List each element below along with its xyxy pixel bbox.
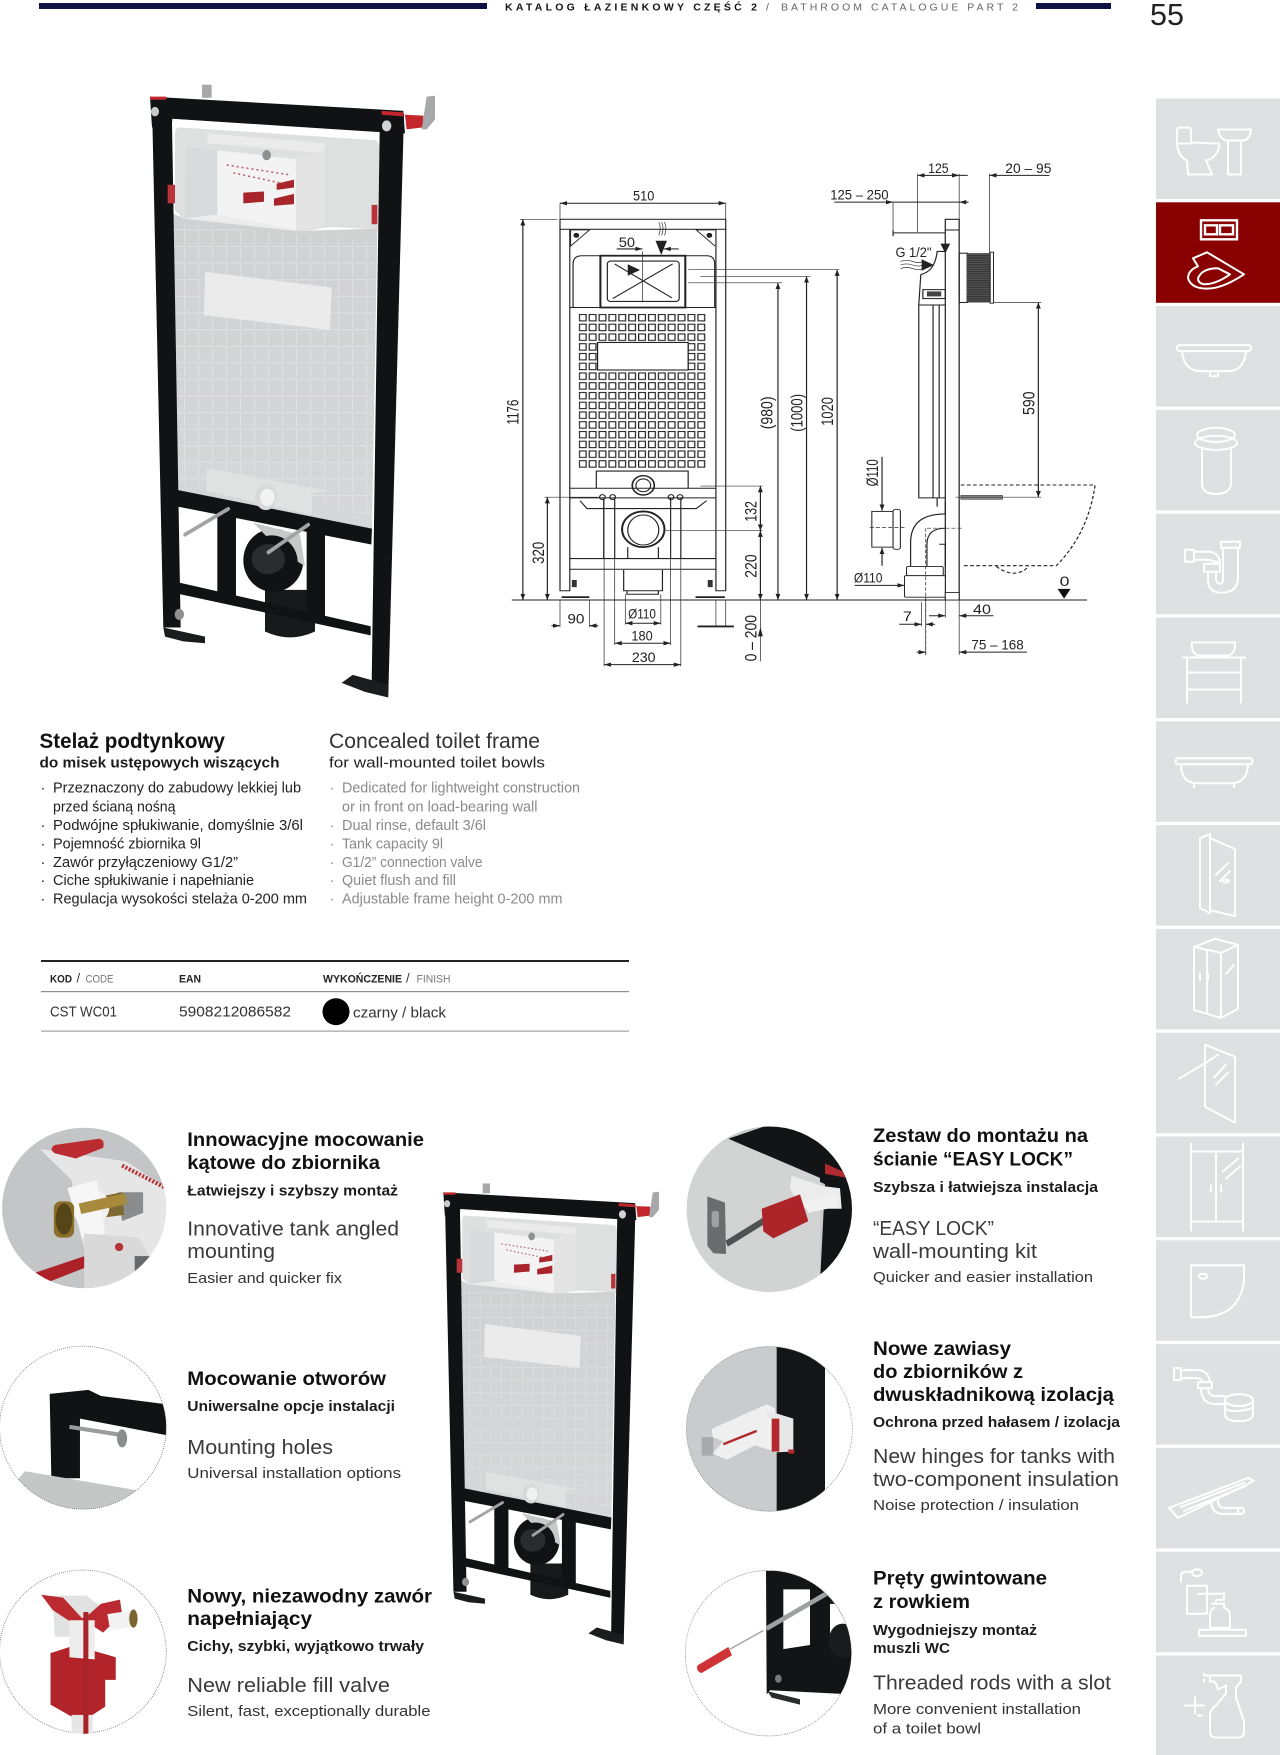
feature list English: ·	[330, 836, 334, 852]
tile: linear drain	[1156, 1448, 1280, 1548]
feature text: easy lock: ścianie “EASY LOCK”	[873, 1148, 1073, 1170]
feature text: mounting holes: Uniwersalne opcje instalacji	[187, 1399, 395, 1415]
dimension: 90	[551, 600, 598, 627]
dimension: 590	[956, 302, 1041, 497]
dimension: (1000): (1000)	[789, 394, 807, 432]
feature text: hinges	[873, 1338, 1121, 1514]
label: G 1/2 inlet: G 1/2"	[896, 245, 931, 261]
dimension: lower diameter 110: Ø110	[854, 570, 882, 586]
feature text: threaded rods: Threaded rods with a slot	[873, 1672, 1111, 1694]
feature text: fill valve: Cichy, szybki, wyjątkowo trwały	[187, 1639, 424, 1655]
feature text: fill valve: napełniający	[187, 1608, 312, 1630]
feature list Polish: Regulacja wysokości stelaża 0-200 mm	[53, 892, 307, 908]
feature text: threaded rods: Wygodniejszy montaż	[873, 1623, 1037, 1639]
feature list Polish: ·	[40, 855, 45, 871]
table value: finish: czarny / black	[353, 1005, 447, 1022]
finish swatch: black	[322, 998, 350, 1025]
tile: cleaning spray	[1156, 1656, 1280, 1755]
feature text: hinges: do zbiorników z	[873, 1361, 1023, 1383]
detail circle: easy lock	[686, 1126, 852, 1292]
feature list English: Quiet flush and fill	[342, 873, 456, 889]
second product photo: concealed frame	[443, 1183, 659, 1644]
dimensions: 40, 7, 75-168: 75 – 168	[971, 638, 1024, 653]
label: G 1/2 inlet	[896, 245, 934, 271]
dimension: 320	[530, 497, 598, 600]
catalogue running title: BATHROOM CATALOGUE PART 2	[781, 2, 1018, 14]
product photo: concealed frame	[150, 85, 435, 697]
feature list English: Adjustable frame height 0-200 mm	[342, 892, 562, 908]
table header: code: CODE	[86, 974, 114, 986]
dashed toilet bowl outline	[961, 485, 1095, 573]
feature text: mounting holes	[187, 1368, 401, 1482]
feature text: tank angled mounting: Innowacyjne mocowanie	[187, 1129, 424, 1151]
product title Polish: Stelaż podtynkowy	[40, 730, 225, 753]
tile: shower tray	[1156, 1240, 1280, 1341]
feature list Polish: ·	[40, 818, 45, 834]
table header: finish: /	[406, 971, 410, 986]
feature text: easy lock: Quicker and easier installation	[873, 1270, 1093, 1286]
feature list Polish: ·	[40, 836, 45, 852]
product title English	[329, 730, 545, 772]
catalogue running title	[505, 0, 1018, 14]
dimension: (980): (980)	[759, 396, 777, 429]
tile: shower door	[1156, 825, 1280, 926]
feature list Polish: Zawór przyłączeniowy G1/2”	[53, 855, 238, 871]
header bar right	[1036, 3, 1111, 9]
catalogue running title: KATALOG ŁAZIENKOWY CZĘŚĆ 2	[505, 0, 757, 14]
feature list Polish: ·	[40, 781, 45, 797]
feature list Polish: ·	[40, 873, 45, 889]
feature list English: Tank capacity 9l	[342, 836, 443, 852]
feature text: threaded rods: Pręty gwintowane	[873, 1568, 1047, 1590]
table header: finish: FINISH	[416, 974, 451, 986]
detail circle: threaded rods	[683, 1567, 857, 1740]
dimensions: 125, 20-95, 125-250: 125	[928, 161, 949, 177]
feature list Polish: Podwójne spłukiwanie, domyślnie 3/6l	[53, 818, 303, 834]
dimensions: 132, 220, 0-200	[666, 486, 763, 661]
dimensions: 125, 20-95, 125-250: 20 – 95	[1005, 161, 1051, 177]
technical drawing with dimensions	[505, 161, 1095, 666]
product title English: for wall-mounted toilet bowls	[329, 754, 545, 772]
dimensions: 132, 220, 0-200: 0 – 200	[742, 615, 761, 661]
feature text: threaded rods: of a toilet bowl	[873, 1722, 981, 1738]
tile: washbasin	[1156, 306, 1280, 407]
feature text: easy lock: Zestaw do montażu na	[873, 1125, 1088, 1147]
feature list English: ·	[330, 818, 334, 834]
side view of frame	[893, 219, 993, 655]
dimension: 510	[560, 189, 726, 219]
feature text: easy lock: Szybsza i łatwiejsza instalacja	[873, 1180, 1099, 1196]
dimension: 590: 590	[1020, 391, 1039, 415]
dimension: 50 with water inlet arrow	[617, 222, 679, 301]
feature text: threaded rods	[873, 1568, 1111, 1738]
feature text: threaded rods: z rowkiem	[873, 1591, 970, 1613]
dimension: diameter 110 front: Ø110	[628, 606, 656, 622]
dimension: 320: 320	[530, 542, 548, 564]
feature text: hinges: dwuskładnikową izolacją	[873, 1384, 1114, 1406]
feature text: tank angled mounting: mounting	[187, 1241, 275, 1263]
tile: flush plate and seat (active)	[1156, 202, 1280, 303]
feature list Polish: Przeznaczony do zabudowy lekkiej lub	[53, 781, 301, 797]
feature list English: ·	[330, 892, 334, 908]
feature text: easy lock	[872, 1125, 1099, 1286]
zero level marker: 0	[1060, 574, 1069, 590]
feature text: fill valve: New reliable fill valve	[187, 1675, 390, 1697]
feature text: tank angled mounting: kątowe do zbiornika	[187, 1152, 380, 1174]
feature list Polish	[40, 781, 307, 908]
feature text: tank angled mounting: Easier and quicker fix	[187, 1271, 343, 1287]
table header: code	[50, 971, 114, 986]
feature list English: or in front on load-bearing wall	[342, 800, 538, 816]
feature text: mounting holes: Mounting holes	[187, 1437, 333, 1459]
feature text: easy lock: wall-mounting kit	[872, 1241, 1037, 1263]
detail: outlet piece with diameter 110	[864, 457, 905, 566]
dimensions: 125, 20-95, 125-250	[830, 161, 1051, 253]
product title English: Concealed toilet frame	[329, 730, 540, 753]
product title Polish: do misek ustępowych wiszących	[40, 754, 280, 772]
dimension: 90: 90	[567, 611, 584, 627]
tile: double shower door	[1156, 1136, 1280, 1237]
catalogue running title: /	[766, 2, 769, 14]
feature list Polish: przed ścianą nośną	[53, 800, 176, 816]
feature text: mounting holes: Universal installation options	[187, 1466, 401, 1482]
tile: vanity furniture	[1156, 618, 1280, 718]
detail: outlet piece with diameter 110: Ø110	[864, 459, 882, 486]
feature list English: Dual rinse, default 3/6l	[342, 818, 486, 834]
dimensions: 132, 220, 0-200: 220	[742, 554, 761, 578]
table value: EAN: 5908212086582	[179, 1004, 291, 1021]
table header: EAN: EAN	[179, 974, 201, 986]
feature list Polish: ·	[40, 892, 45, 908]
dimension: 180	[615, 501, 671, 645]
feature text: tank angled mounting	[187, 1129, 424, 1287]
dimension: 1176: 1176	[505, 400, 523, 425]
detail circle: new hinges	[683, 1345, 855, 1513]
dimension: 50 with water inlet arrow: 50	[619, 235, 635, 251]
feature text: hinges: two-component insulation	[873, 1469, 1119, 1491]
ground line	[512, 598, 1087, 601]
dimension: 180: 180	[631, 629, 653, 644]
feature list Polish: Pojemność zbiornika 9l	[53, 836, 201, 852]
table header: code: KOD	[50, 974, 72, 986]
feature text: tank angled mounting: Łatwiejszy i szybszy montaż	[187, 1184, 398, 1200]
feature text: fill valve	[187, 1586, 432, 1720]
dimension: 1020: 1020	[819, 397, 837, 426]
tile: tray waste	[1156, 1344, 1280, 1445]
zero level marker	[1058, 574, 1071, 599]
front view of frame	[560, 219, 734, 626]
feature text: easy lock: “EASY LOCK”	[873, 1218, 994, 1240]
feature text: hinges: Ochrona przed hałasem / izolacja	[873, 1415, 1121, 1431]
tile: shower cabin	[1156, 929, 1280, 1029]
feature text: threaded rods: muszli WC	[873, 1641, 951, 1657]
header bar left	[39, 3, 487, 9]
detail circle: fill valve	[0, 1570, 166, 1740]
product code table	[41, 960, 629, 1032]
feature list English: Dedicated for lightweight construction	[342, 781, 580, 797]
dimension: 230	[604, 498, 681, 666]
dimension: 510: 510	[633, 189, 654, 204]
dimensions: 40, 7, 75-168: 40	[973, 602, 991, 618]
feature text: fill valve: Silent, fast, exceptionally durable	[187, 1704, 430, 1720]
table header: finish: WYKOŃCZENIE	[323, 973, 402, 986]
feature text: hinges: Nowe zawiasy	[873, 1338, 1011, 1360]
tile: accessories	[1156, 1552, 1280, 1652]
category sidebar	[1156, 98, 1280, 1755]
table header: finish	[323, 971, 451, 986]
dimension: diameter 110 front	[625, 594, 661, 625]
dimensions: 125, 20-95, 125-250: 125 – 250	[830, 188, 889, 203]
tile: pop-up waste	[1156, 410, 1280, 510]
feature list English	[330, 781, 580, 908]
tile: toilet and basin	[1156, 98, 1280, 199]
dimension: 230: 230	[632, 650, 656, 666]
tile: walk-in panel	[1156, 1033, 1280, 1133]
feature list English: ·	[330, 781, 334, 797]
feature list English: ·	[330, 855, 334, 871]
feature text: hinges: Noise protection / insulation	[873, 1498, 1079, 1514]
tile: bathtub	[1156, 721, 1280, 822]
dimensions: 40, 7, 75-168	[899, 597, 1027, 655]
feature text: tank angled mounting: Innovative tank angled	[187, 1218, 399, 1240]
detail circle: mounting holes	[0, 1345, 168, 1513]
feature text: mounting holes: Mocowanie otworów	[187, 1368, 387, 1390]
table value: code: CST WC01	[50, 1004, 117, 1021]
feature text: hinges: New hinges for tanks with	[873, 1446, 1115, 1468]
tile: siphon	[1156, 514, 1280, 614]
feature list English: ·	[330, 873, 334, 889]
dimensions: 132, 220, 0-200: 132	[742, 501, 761, 522]
dimensions: 40, 7, 75-168: 7	[903, 609, 912, 625]
detail circle: angled tank mounting	[0, 1126, 168, 1291]
feature text: fill valve: Nowy, niezawodny zawór	[187, 1586, 432, 1608]
feature text: threaded rods: More convenient installation	[873, 1702, 1081, 1718]
table header: code: /	[76, 971, 80, 986]
feature list Polish: Ciche spłukiwanie i napełnianie	[53, 873, 254, 889]
feature list English: G1/2” connection valve	[342, 855, 482, 871]
product title Polish	[40, 730, 280, 772]
